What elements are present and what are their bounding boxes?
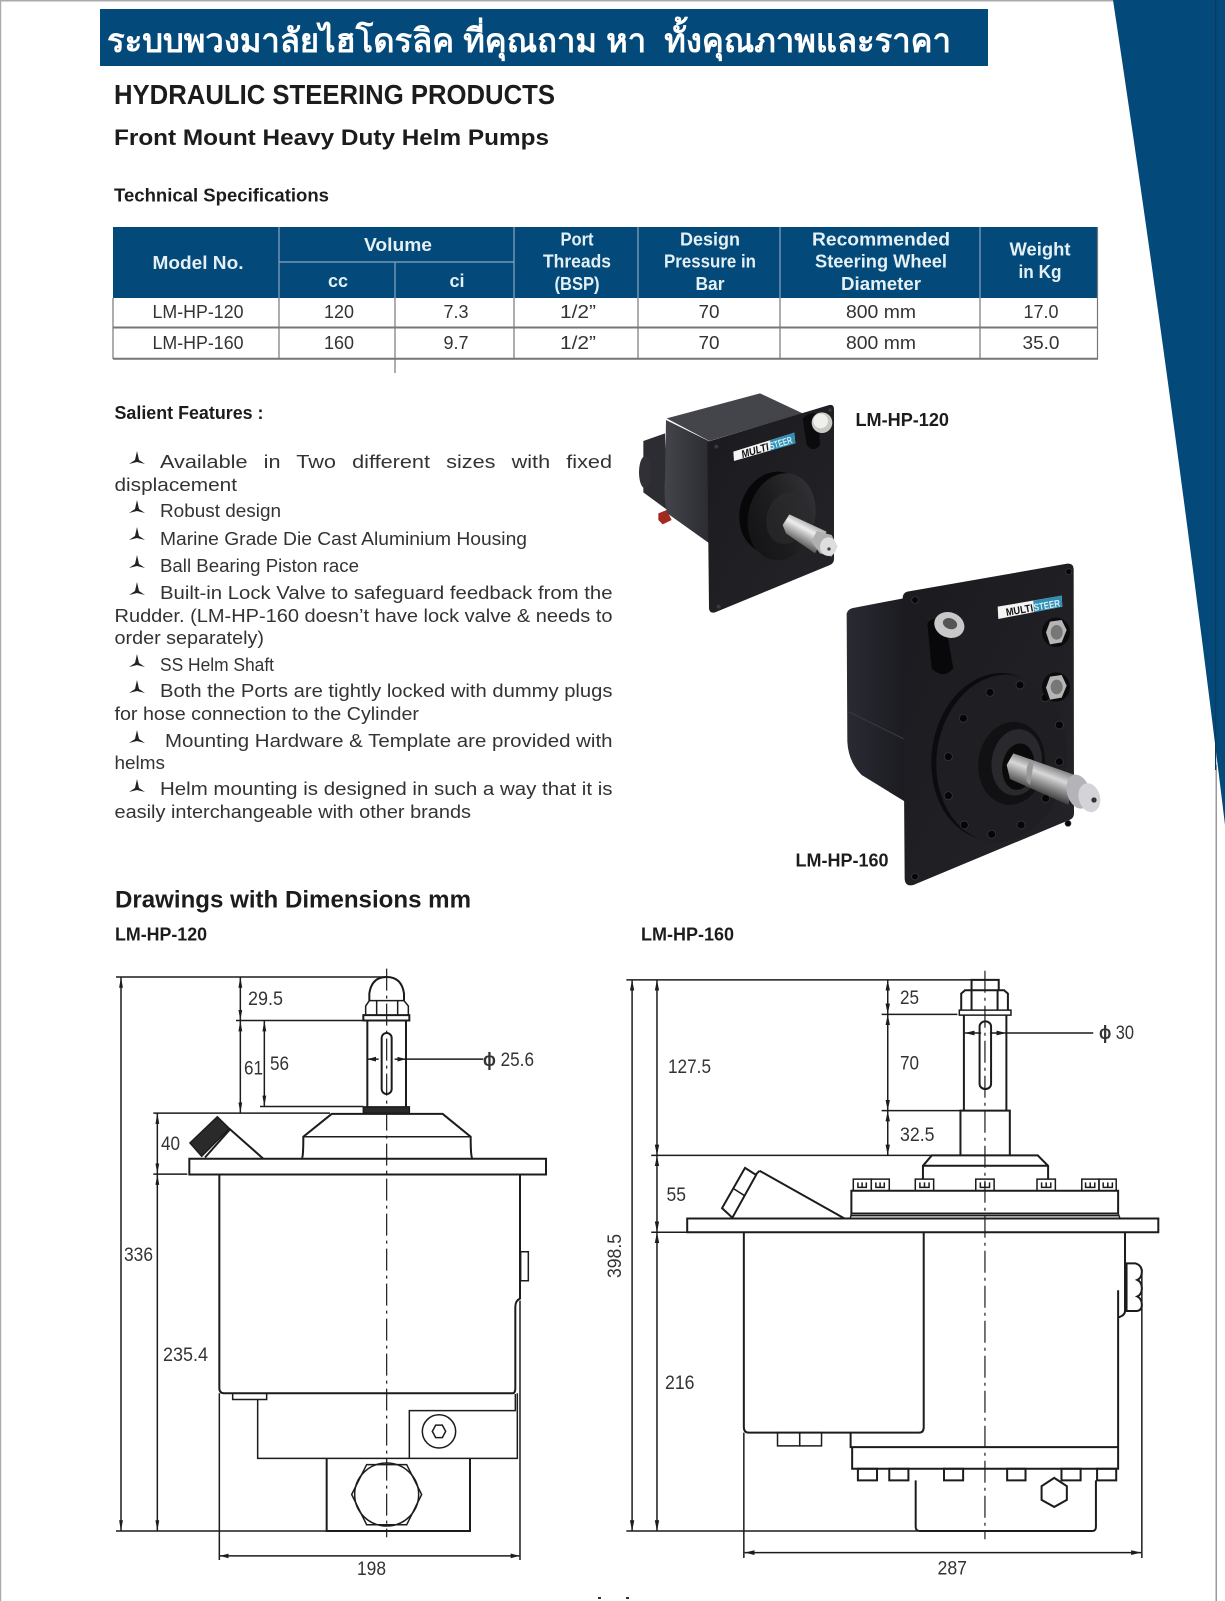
top plug with recess [927,608,968,674]
feature text lines: Marine Grade Die Cast Aluminium Housing [160,529,527,549]
feature text lines: for hose connection to the Cylinder [114,704,419,724]
flange disc [921,664,1078,851]
table row: LM-HP-120: 17.0 [1024,302,1058,322]
steel shaft [783,514,837,557]
dimension labels: 287 [938,1558,967,1580]
logo plate: STEER [1033,598,1061,614]
dimension labels: 235.4 [163,1345,208,1366]
dimension labels: 29.5 [248,989,283,1010]
table header labels: in Kg [1018,262,1062,282]
top plug [803,412,832,449]
body side face [665,420,712,545]
feature text lines [114,452,612,822]
dimension labels: 336 [124,1245,153,1266]
table header background [113,227,1098,298]
table header labels: Weight [1010,240,1070,260]
feature text lines: helms [114,753,165,773]
sub heading: Front Mount Heavy Duty Helm Pumps [114,125,549,150]
dimension labels: 32.5 [900,1125,934,1146]
plate screws [714,408,832,609]
rear block [643,433,667,510]
technical specifications heading: Technical Specifications [114,186,329,206]
feature text lines: SS Helm Shaft [160,655,274,675]
drawing label: LM-HP-120: LM-HP-120 [115,924,207,944]
table row: LM-HP-120: 1/2” [560,302,596,322]
table row: LM-HP-120: 800 mm [846,302,916,322]
logo plate [998,596,1062,619]
central hub [973,717,1050,809]
table row: LM-HP-160 [152,333,1060,353]
steel shaft [1007,753,1103,815]
dimension labels [124,989,534,1580]
main heading: HYDRAULIC STEERING PRODUCTS [114,79,555,110]
table row: LM-HP-160: LM-HP-160 [152,333,244,353]
dimension labels: 25 [900,988,919,1009]
dimension labels [605,988,1134,1580]
feature text lines: displacement [114,475,237,495]
table row: LM-HP-120: LM-HP-120 [152,302,244,322]
salient features heading: Salient Features : [114,403,264,423]
dimension labels: 61 [244,1058,263,1080]
drawing outlines and dimension lines [116,969,546,1560]
dimension labels: 56 [270,1054,289,1075]
table header labels: Model No. [152,253,244,273]
logo plate: MULTI [1005,602,1034,619]
table header labels: Port [560,230,594,250]
mounting plate [903,564,1074,885]
feature text lines: Helm mounting is designed in such a way that it is [160,779,612,799]
table header labels: Design [680,230,740,250]
table row: LM-HP-120: 120 [324,302,354,322]
dimension labels: 70 [900,1054,919,1074]
logo plate: MULTI [740,441,771,461]
drawing outlines and dimension lines [626,971,1158,1558]
table header labels [152,230,1070,294]
mounting plate [707,405,834,613]
logo plate: STEER [768,435,794,453]
table row: LM-HP-160: 1/2” [560,333,596,353]
round boss [729,463,825,567]
table row: LM-HP-160: 800 mm [846,333,916,353]
table header labels: Diameter [841,274,921,294]
feature text lines: Mounting Hardware & Template are provided with [165,731,612,751]
product photo: LM-HP-120 [639,393,837,613]
dimension labels: 216 [665,1373,694,1394]
dimension labels: 127.5 [668,1057,711,1078]
feature bullets [129,451,145,792]
drawing label: LM-HP-160: LM-HP-160 [641,924,734,944]
product photo label: LM-HP-160: LM-HP-160 [796,850,888,870]
technical drawing: LM-HP-160 [605,971,1158,1580]
table borders [113,227,1098,373]
product photo: LM-HP-160 [847,564,1103,885]
table row: LM-HP-160: 70 [698,333,720,353]
technical drawing: LM-HP-120 [116,969,546,1580]
salient features list [114,451,612,822]
feature text lines: easily interchangeable with other brands [114,802,471,822]
table header labels: Steering Wheel [815,252,947,272]
feature text lines: Ball Bearing Piston race [160,556,359,576]
body top face [667,393,803,441]
table header labels: ci [449,271,465,291]
table row: LM-HP-160: 35.0 [1022,333,1060,353]
table row: LM-HP-160: 160 [324,333,354,353]
Thai title banner: ระบบพวงมาลัยไฮโดรลิค ที่คุณถาม หา ทั้งคุณภาพและราคา [107,16,951,62]
table header labels: Volume [364,235,432,255]
feature text lines: Both the Ports are tightly locked with dummy plugs [160,681,612,701]
feature text lines: Available in Two different sizes with fixed [160,452,612,472]
dimension labels: ϕ 30 [1099,1023,1134,1044]
table header labels: Bar [696,274,724,294]
logo plate [733,433,795,461]
dimension labels: 198 [357,1559,386,1580]
specifications table [113,227,1098,373]
feature text lines: order separately) [114,628,264,648]
decorative blue side shape [1113,0,1225,825]
feature text lines: Robust design [160,501,281,521]
table header labels: Pressure in [664,252,756,272]
dimension labels: 398.5 [605,1234,626,1278]
drawings heading: Drawings with Dimensions mm [115,886,471,914]
dimension labels: 55 [666,1185,686,1206]
feature text lines: Built-in Lock Valve to safeguard feedback from the [160,583,612,603]
table row: LM-HP-120 [152,302,1058,322]
table header labels: cc [328,271,348,291]
table header labels: Threads [543,252,611,272]
table header labels: Recommended [812,230,950,250]
body side [847,598,905,802]
dimension labels: ϕ 25.6 [483,1050,534,1071]
table header labels: (BSP) [554,274,600,294]
red plug [658,510,672,524]
table row: LM-HP-120: 70 [698,302,720,322]
dimension labels: 40 [161,1134,180,1155]
Thai title banner [100,9,988,66]
side nuts [1042,618,1070,702]
table row: LM-HP-160: 9.7 [444,333,468,353]
flange bolts [912,569,1072,880]
feature text lines: Rudder. (LM-HP-160 doesn’t have lock valve & needs to [114,606,612,626]
product photo label: LM-HP-120: LM-HP-120 [856,409,949,430]
table row: LM-HP-120: 7.3 [444,302,468,322]
